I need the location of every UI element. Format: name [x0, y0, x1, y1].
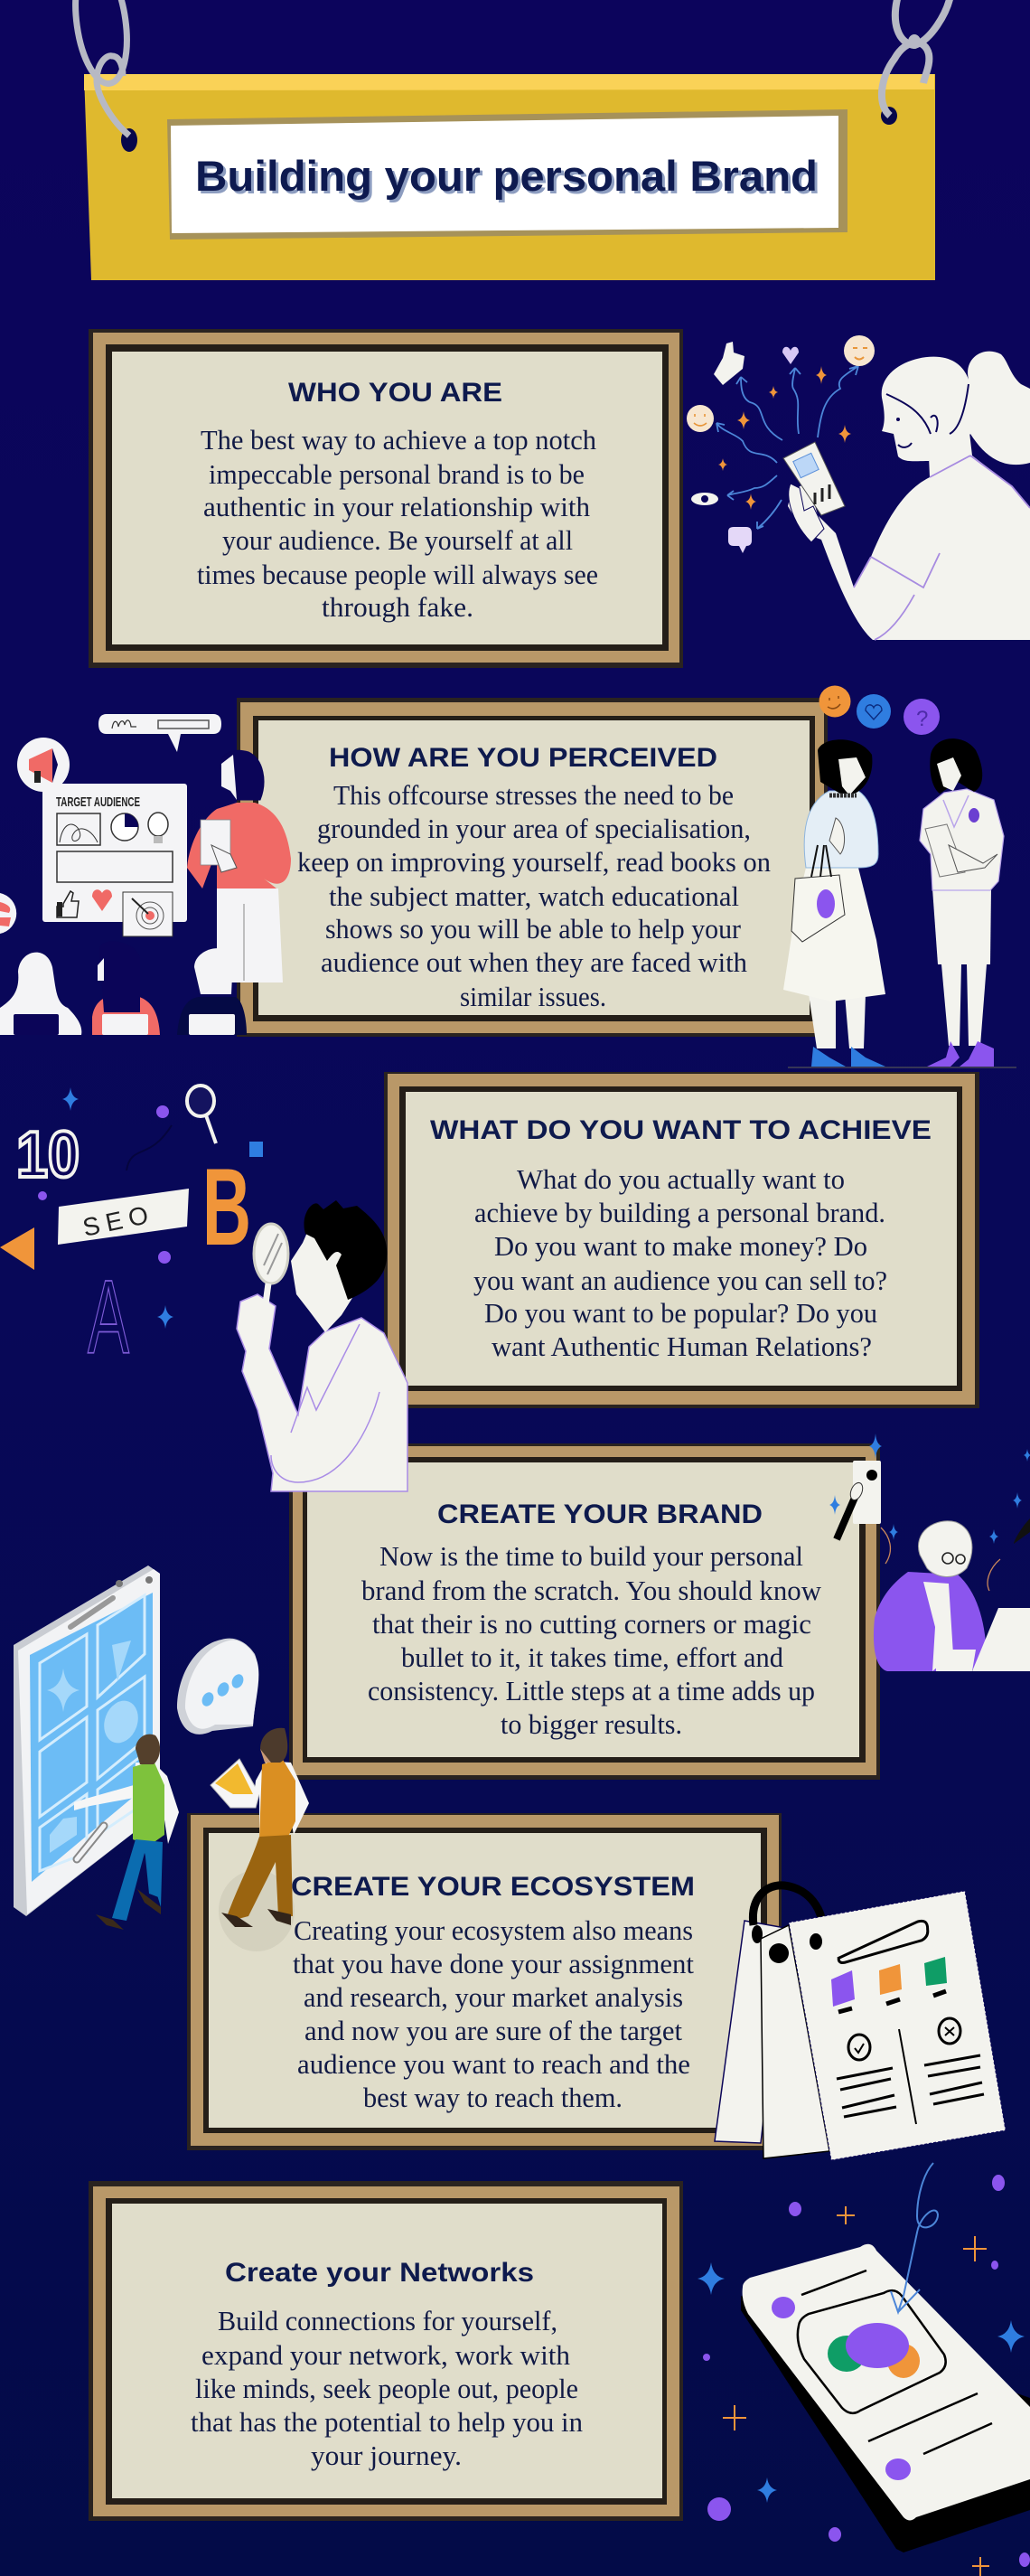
body text: and research, your market analysis	[304, 1981, 683, 2013]
icon: chat bubble	[177, 1639, 258, 1735]
icon: megaphone	[17, 738, 70, 792]
body text	[297, 779, 771, 1012]
title: Building your personal Brand	[195, 152, 818, 200]
illustration: ringed cards	[715, 1885, 1006, 2160]
body text: consistency. Little steps at a time adds up	[368, 1675, 815, 1706]
body text: Do you want to make money? Do	[494, 1230, 867, 1262]
board: target audience: TARGET AUDIENCE	[56, 794, 140, 810]
circles	[828, 2323, 920, 2378]
laptop	[972, 1608, 1030, 1671]
panel: who you are	[89, 329, 683, 668]
woman with clipboard	[920, 738, 1004, 1067]
illustration: older woman at laptop	[874, 1449, 1030, 1671]
ring	[753, 1885, 823, 1948]
body text: expand your network, work with	[201, 2339, 571, 2371]
body text: through fake.	[322, 591, 473, 623]
card main	[752, 1891, 1006, 2160]
number 10: 10	[16, 1119, 80, 1191]
icon: heart	[782, 347, 799, 364]
icon: arrow curve	[891, 2163, 938, 2312]
illustration: presenter with target audience board	[0, 714, 291, 1035]
body text: you want an audience you can sell to?	[473, 1264, 887, 1296]
card	[761, 1925, 829, 2158]
body text: This offcourse stresses the need to be	[333, 779, 734, 811]
heading: HOW ARE YOU PERCEIVED	[329, 743, 717, 773]
illustration: woman with phone and social icons	[687, 335, 1030, 640]
panel: what do you want to achieve	[384, 1072, 979, 1408]
illustration: two women talking	[783, 685, 1016, 1067]
body text: and now you are sure of the target	[304, 2015, 682, 2046]
icon: speech bubble	[728, 527, 752, 553]
body text: bullet to it, it takes time, effort and	[401, 1641, 783, 1673]
illustration: giant smartphone	[14, 1565, 160, 1916]
reaction bubbles: ?	[916, 707, 928, 731]
blue square	[249, 1142, 263, 1157]
sparkles and dots around phone	[698, 2175, 1030, 2576]
panel: create your ecosystem	[187, 1813, 782, 2150]
body text: the subject matter, watch educational	[329, 880, 739, 912]
head	[918, 1521, 972, 1576]
body text	[293, 1914, 694, 2113]
sparkles	[889, 1449, 1030, 1544]
panel: create your brand	[289, 1443, 880, 1780]
heading: WHO YOU ARE	[288, 378, 502, 408]
board: target audience	[42, 784, 187, 936]
letter A: A	[88, 1258, 129, 1376]
body text	[197, 424, 598, 623]
orange arrow	[0, 1227, 34, 1270]
reaction bubbles	[819, 685, 940, 735]
hair	[304, 1200, 387, 1300]
illustration: man in orange vest with laptop	[211, 1728, 309, 1951]
body text: audience out when they are faced with	[321, 946, 747, 978]
body text: What do you actually want to	[517, 1163, 845, 1195]
body text: want Authentic Human Relations?	[492, 1330, 872, 1362]
card	[715, 1921, 785, 2143]
body text	[361, 1540, 822, 1740]
body text: times because people will always see	[197, 559, 598, 590]
icon: emoji	[687, 405, 714, 432]
torso	[237, 1294, 407, 1491]
body text: achieve by building a personal brand.	[474, 1197, 885, 1228]
body text: similar issues.	[460, 981, 606, 1012]
body text: that has the potential to help you in	[191, 2406, 583, 2438]
banner: title sign	[84, 74, 935, 280]
body text: authentic in your relationship with	[203, 491, 590, 522]
woman with tote bag	[783, 739, 885, 1067]
magnifier icon	[187, 1086, 216, 1143]
body text: your journey.	[311, 2440, 462, 2471]
body text: audience you want to reach and the	[297, 2048, 690, 2080]
icon: thumbs up	[714, 342, 744, 385]
hanging rings: right	[882, 0, 950, 116]
hanging rings: left	[69, 0, 134, 136]
heading: WHAT DO YOU WANT TO ACHIEVE	[430, 1115, 932, 1145]
body text	[473, 1163, 887, 1362]
body text: Now is the time to build your personal	[379, 1540, 803, 1572]
seo tag: SEO	[80, 1199, 157, 1242]
body text: your audience. Be yourself at all	[222, 524, 573, 556]
heading: CREATE YOUR ECOSYSTEM	[291, 1872, 695, 1902]
panel: create your networks	[89, 2181, 683, 2521]
sparkles and dots	[38, 1087, 173, 1329]
woman figure	[788, 352, 1030, 640]
icon: eye	[691, 493, 718, 505]
body text: Creating your ecosystem also means	[294, 1914, 693, 1946]
body text: like minds, seek people out, people	[195, 2373, 578, 2404]
body text: brand from the scratch. You should know	[361, 1575, 822, 1606]
illustration: drawing card and sparkles	[829, 1434, 882, 1539]
illustration: man in green vest	[74, 1735, 179, 1930]
audience	[0, 893, 247, 1035]
inner frame	[798, 2290, 946, 2413]
body text: that their is no cutting corners or magic	[372, 1608, 811, 1640]
icon: arrows	[716, 366, 858, 529]
title: Building your personal Brand	[198, 155, 820, 202]
body text: best way to reach them.	[363, 2082, 623, 2113]
heading: CREATE YOUR BRAND	[437, 1500, 763, 1529]
magnifier	[254, 1224, 288, 1311]
body text: keep on improving yourself, read books on	[297, 846, 771, 878]
body text: grounded in your area of specialisation,	[317, 813, 751, 844]
head	[291, 1216, 361, 1332]
illustration: seo icons	[0, 1086, 263, 1376]
speech bubble	[98, 714, 221, 752]
letter B: B	[202, 1145, 251, 1268]
illustration: man with magnifier	[237, 1200, 407, 1491]
seo tag	[58, 1189, 189, 1245]
body text: impeccable personal brand is to be	[209, 458, 585, 490]
sparkles	[718, 366, 851, 510]
body text: The best way to achieve a top notch	[201, 424, 596, 456]
body text: to bigger results.	[501, 1708, 682, 1740]
body text	[191, 2305, 583, 2471]
body text: that you have done your assignment	[293, 1948, 694, 1979]
body text: shows so you will be able to help your	[325, 913, 742, 945]
panel: how are you perceived	[237, 698, 828, 1037]
body text: Do you want to be popular? Do you	[484, 1297, 877, 1329]
icon: emoji	[844, 335, 875, 366]
phone screen	[743, 2244, 1030, 2520]
heading: Create your Networks	[225, 2258, 534, 2288]
phone	[783, 442, 845, 542]
illustration: tilted phone with connected circles	[741, 2163, 1030, 2552]
jacket	[874, 1572, 987, 1671]
app tiles	[40, 1595, 145, 1871]
body text: Build connections for yourself,	[218, 2305, 557, 2336]
presenter	[187, 750, 291, 982]
